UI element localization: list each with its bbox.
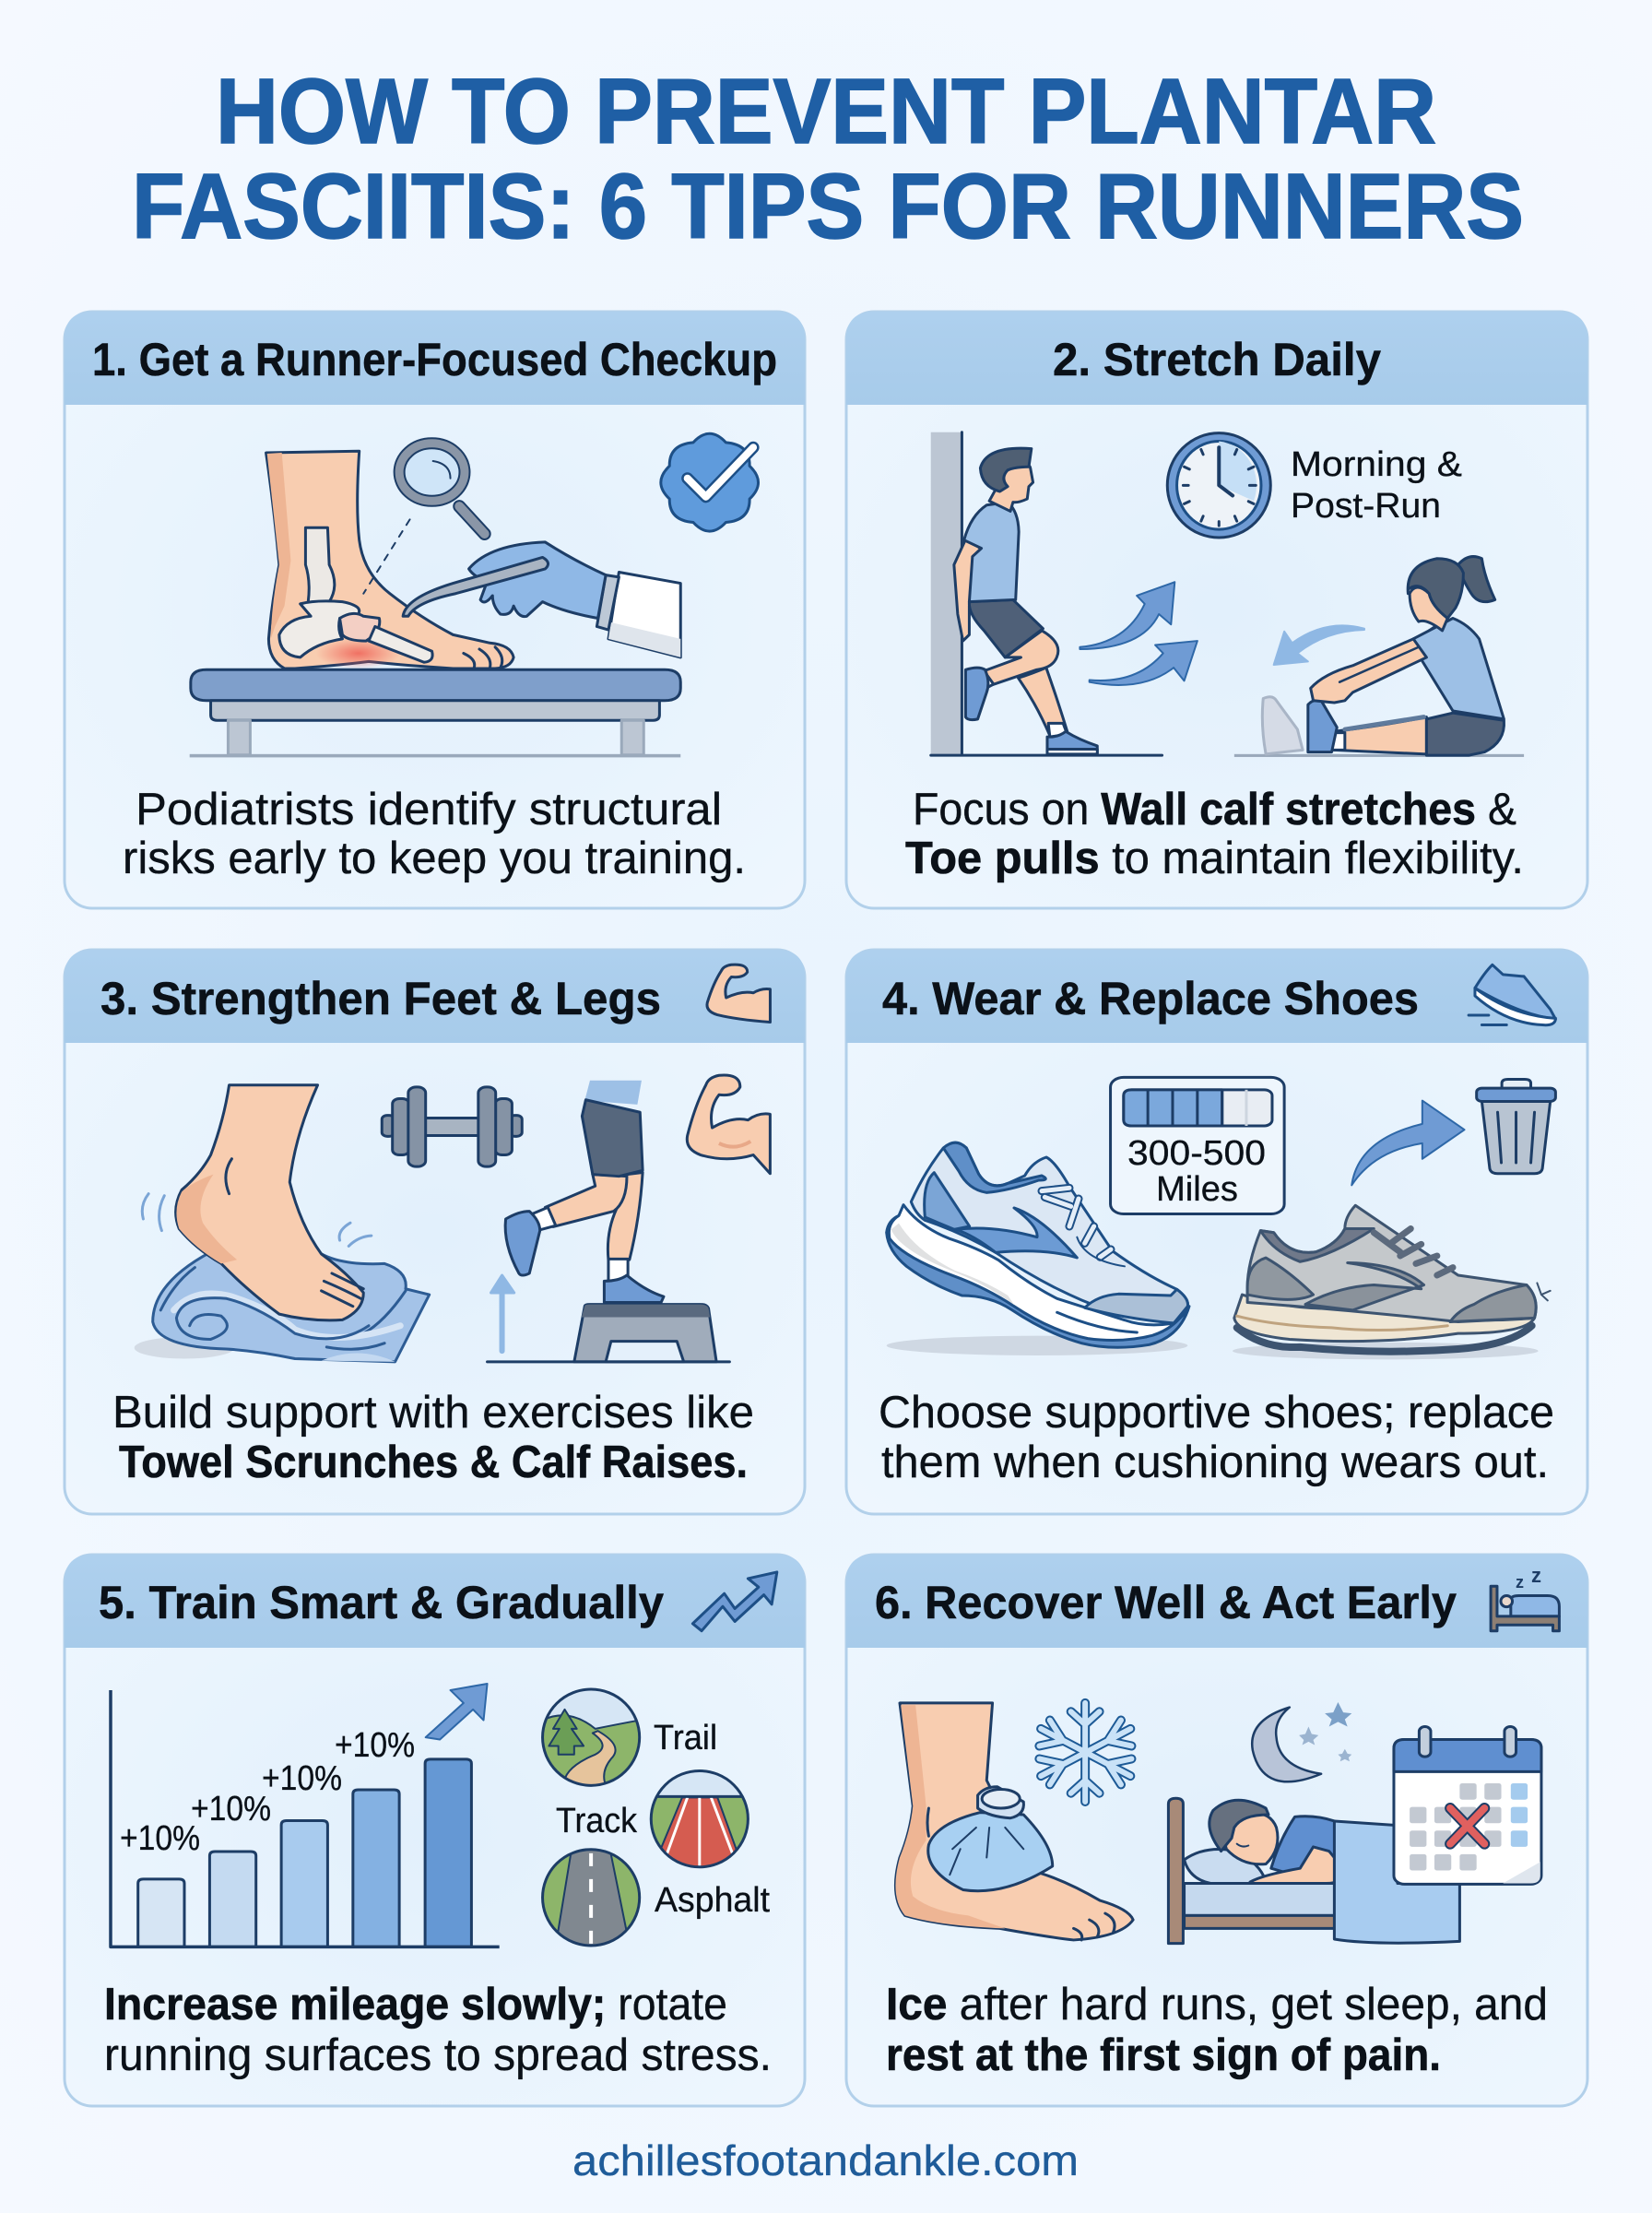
illustration: sleeping person in bed xyxy=(1168,1798,1459,1944)
panel: 1 get a runner-focused checkup xyxy=(65,312,805,908)
icon: snowflake xyxy=(1039,1703,1131,1802)
text: tip 5 description: Increase mileage slowly; rotate xyxy=(104,1980,727,2030)
heading: tip 1: 1. Get a Runner-Focused Checkup xyxy=(92,334,777,385)
icon: calendar with rest day xyxy=(1394,1727,1541,1884)
labels: plus ten percent steps xyxy=(120,1726,415,1858)
text: morning and post-run: Post-Run xyxy=(1291,487,1441,526)
illustration: seated toe pull xyxy=(1234,557,1524,757)
heading: tip 3: 3. Strengthen Feet & Legs xyxy=(100,973,661,1024)
icon: clock xyxy=(1167,433,1270,538)
icon: moon and stars xyxy=(1252,1702,1351,1781)
icon: small bed with z's: z xyxy=(1516,1573,1524,1592)
icon: dumbbell xyxy=(382,1087,522,1166)
text: tip 1 description xyxy=(123,785,746,883)
labels: plus ten percent steps: +10% xyxy=(191,1790,271,1828)
text: tip 5 description xyxy=(104,1980,772,2080)
text: tip 4 description xyxy=(879,1388,1554,1487)
arrows: stretch direction xyxy=(1080,582,1364,685)
heading: tip 2: 2. Stretch Daily xyxy=(1053,334,1381,385)
panel: 5 train smart and gradually xyxy=(65,1555,805,2106)
illustration: towel scrunch xyxy=(135,1085,430,1362)
illustration: wall calf stretch xyxy=(931,432,1162,755)
text: tip 4 description: Choose supportive shoes; replace xyxy=(879,1388,1554,1438)
text: tip 3 description: Build support with exercises like xyxy=(112,1388,754,1438)
heading: tip 5: 5. Train Smart & Gradually xyxy=(99,1577,664,1628)
panel: 3 strengthen feet and legs xyxy=(65,950,805,1514)
icon: track surface xyxy=(651,1770,748,1867)
labels: plus ten percent steps: +10% xyxy=(262,1759,342,1798)
icon: small bed with z's xyxy=(1491,1564,1559,1631)
title: FASCIITIS: 6 TIPS FOR RUNNERS xyxy=(132,155,1524,258)
icon: trash can xyxy=(1477,1079,1555,1174)
icon: small bed with z's: z xyxy=(1531,1564,1541,1587)
text: morning and post-run: Morning & xyxy=(1291,445,1462,484)
text: tip 2 description xyxy=(905,785,1524,883)
arrow: to trash xyxy=(1351,1101,1465,1185)
text: tip 6 description xyxy=(886,1980,1548,2080)
icon: trail surface xyxy=(543,1689,640,1785)
heading: tip 4: 4. Wear & Replace Shoes xyxy=(882,973,1419,1024)
illustration: worn running shoe xyxy=(1233,1205,1551,1359)
icon: small bicep xyxy=(707,964,770,1023)
illustration: new running shoe xyxy=(887,1142,1189,1355)
text: tip 1 description: Podiatrists identify structural xyxy=(136,785,722,834)
panel: 6 recover well and act early xyxy=(846,1555,1587,2106)
panel: 2 stretch daily xyxy=(846,312,1587,908)
callout: mileage gauge xyxy=(1111,1077,1284,1214)
text: 300-500 miles: 300-500 xyxy=(1127,1134,1266,1173)
panel: 4 wear and replace shoes xyxy=(846,950,1587,1514)
illustration: foot exam on table xyxy=(190,444,680,757)
text: tip 2 description: Toe pulls to maintain flexibility. xyxy=(905,834,1524,883)
icon: verified check badge xyxy=(661,433,759,531)
icon: asphalt surface xyxy=(543,1850,640,1946)
text: tip 2 description: Focus on Wall calf stretches & xyxy=(913,785,1516,834)
text: tip 5 description: running surfaces to spread stress. xyxy=(104,2030,772,2080)
illustration: calf raise on step xyxy=(488,1081,729,1362)
labels: plus ten percent steps: +10% xyxy=(120,1819,200,1858)
text: tip 6 description: rest at the first sign of pain. xyxy=(886,2030,1441,2080)
text: tip 4 description: them when cushioning wears out. xyxy=(881,1438,1549,1487)
text: 300-500 miles: Miles xyxy=(1156,1170,1238,1209)
labels: plus ten percent steps: +10% xyxy=(335,1726,415,1765)
label: track: Track xyxy=(556,1802,638,1840)
bar chart: mileage progression xyxy=(111,1684,500,1947)
icon: zigzag trend arrow xyxy=(692,1572,777,1631)
text: tip 3 description xyxy=(112,1388,754,1487)
text: 300-500 miles xyxy=(1127,1134,1266,1209)
text: morning and post-run xyxy=(1291,445,1462,526)
icon: flexed bicep xyxy=(687,1075,770,1174)
icon: small running shoe xyxy=(1469,964,1555,1025)
label: asphalt: Asphalt xyxy=(655,1881,770,1920)
text: tip 3 description: Towel Scrunches & Calf Raises. xyxy=(119,1438,748,1487)
title xyxy=(132,60,1524,258)
text: tip 6 description: Ice after hard runs, get sleep, and xyxy=(886,1980,1548,2030)
text: tip 1 description: risks early to keep you training. xyxy=(123,834,746,883)
heading: tip 6: 6. Recover Well & Act Early xyxy=(875,1577,1457,1628)
footer: website: achillesfootandankle.com xyxy=(572,2136,1079,2184)
title: HOW TO PREVENT PLANTAR xyxy=(216,60,1436,163)
label: trail: Trail xyxy=(654,1719,717,1757)
illustration: ice pack on foot xyxy=(895,1703,1133,1940)
